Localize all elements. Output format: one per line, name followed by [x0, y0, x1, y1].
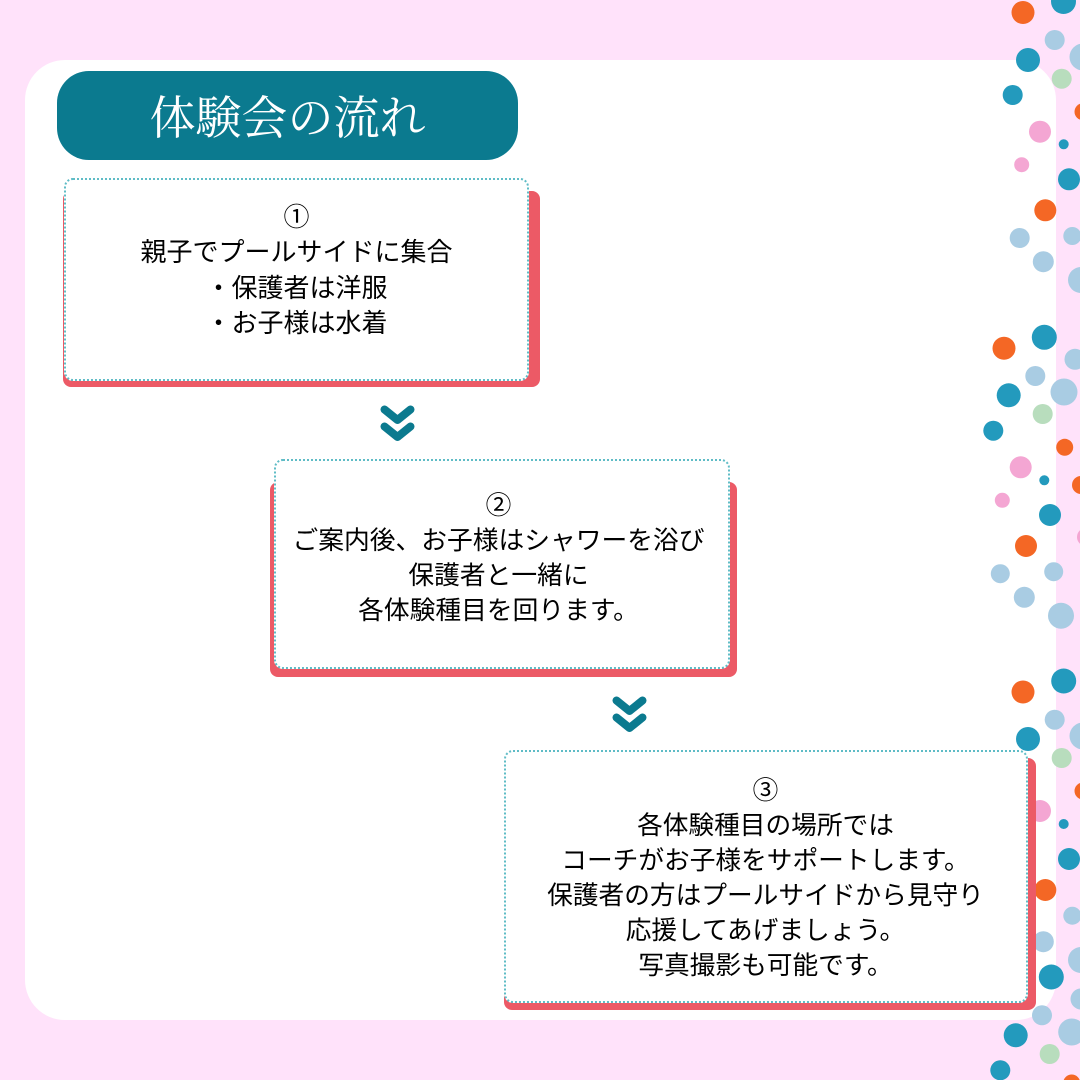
step 3 card — [504, 750, 1036, 1010]
step 1 card — [63, 178, 540, 387]
step 2 text: 各体験種目を回ります。 — [358, 597, 639, 625]
step 3 text: 写真撮影も可能です。 — [638, 952, 893, 980]
step 2 card — [270, 459, 737, 677]
step 3 text: コーチがお子様をサポートします。 — [561, 846, 970, 874]
step 3 shadow — [504, 758, 1036, 1010]
arrow: step 1 to step 2 — [380, 406, 414, 441]
step 1 text: ① — [283, 202, 310, 232]
step 1 text — [140, 202, 452, 338]
step 1 text: ・お子様は水着 — [205, 308, 388, 338]
step 2 text: ② — [486, 492, 511, 520]
step 1 panel — [64, 178, 529, 381]
step 2 text: ご案内後、お子様はシャワーを浴び — [292, 527, 704, 555]
step 3 panel — [504, 750, 1028, 1003]
step 3 text: ③ — [753, 776, 778, 804]
step 3 text: 各体験種目の場所では — [637, 812, 894, 840]
title banner — [57, 71, 518, 160]
step 3 text — [547, 776, 984, 980]
step 3 text: 応援してあげましょう。 — [626, 916, 905, 944]
step 1 shadow — [63, 191, 540, 387]
step 2 text — [292, 492, 704, 625]
step 2 shadow — [270, 482, 737, 677]
step 1 text: 親子でプールサイドに集合 — [140, 237, 452, 267]
title text: 体験会の流れ — [150, 93, 426, 144]
step 2 text: 保護者と一緒に — [408, 562, 589, 590]
arrow: step 2 to step 3 — [612, 696, 646, 732]
step 1 text: ・保護者は洋服 — [205, 273, 388, 303]
step 3 text: 保護者の方はプールサイドから見守り — [547, 882, 984, 910]
step 2 panel — [274, 459, 730, 669]
